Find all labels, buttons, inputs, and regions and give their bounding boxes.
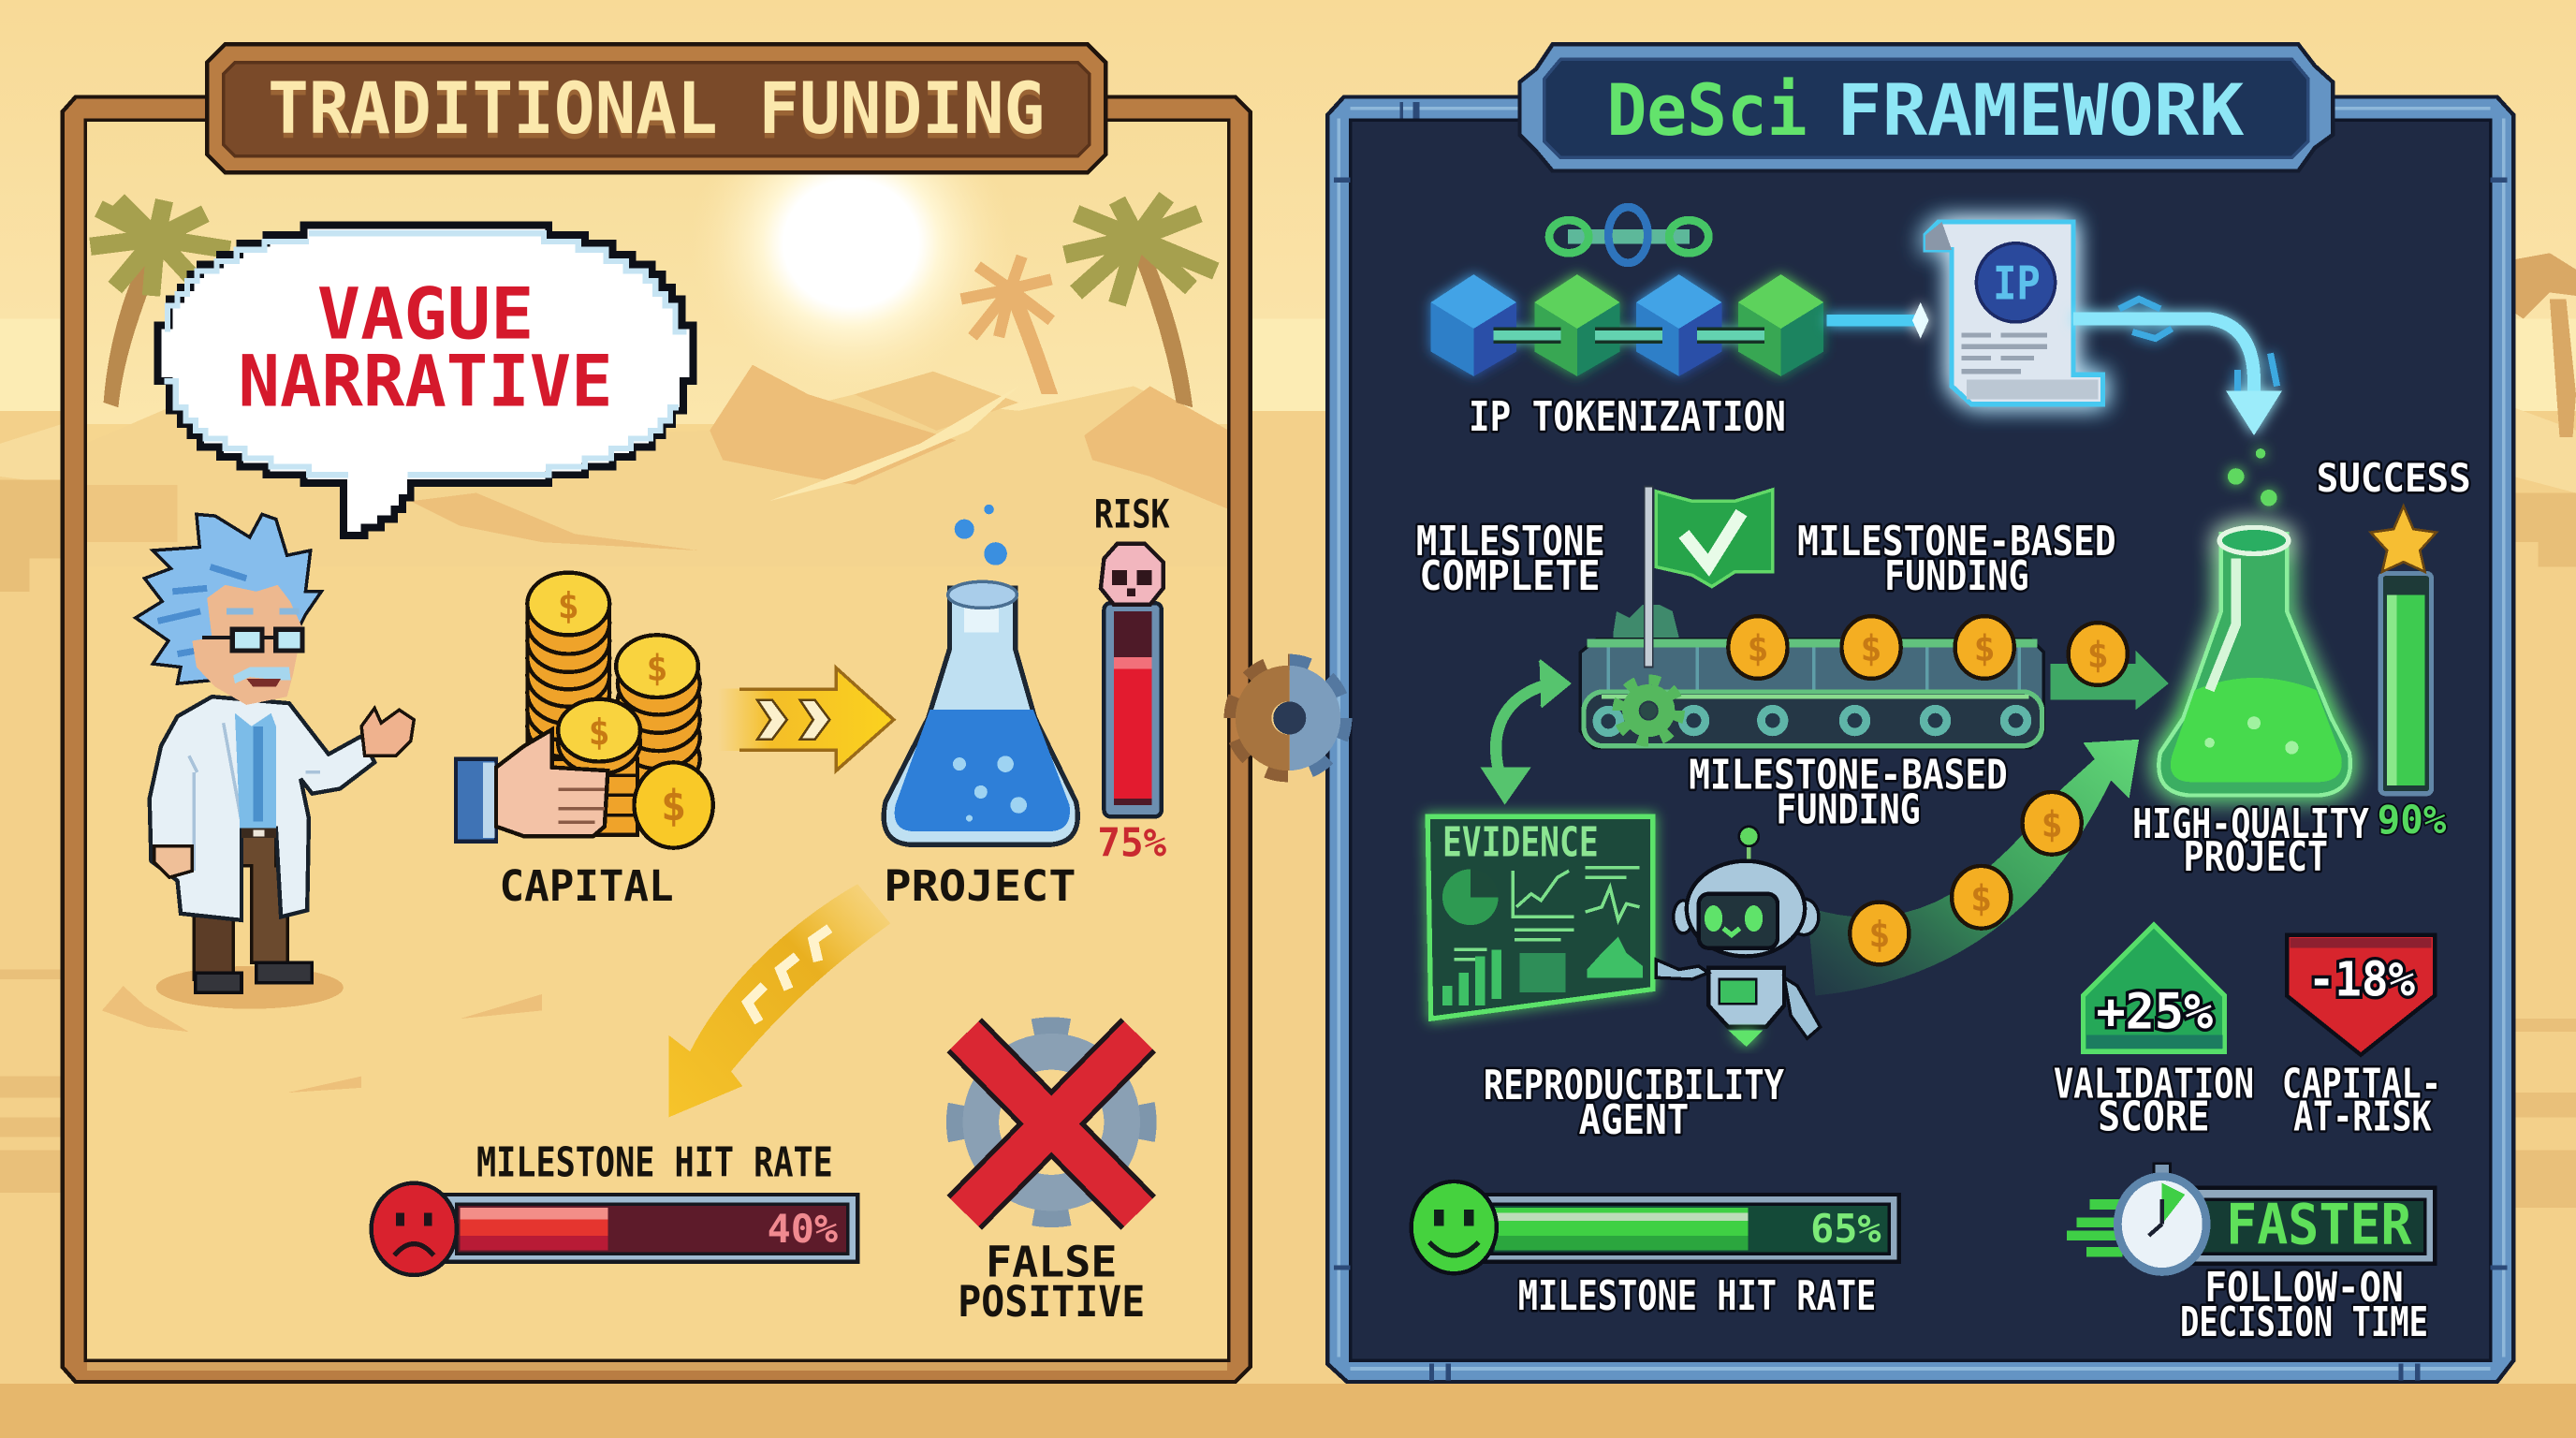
icon: center linked gears xyxy=(1232,662,1344,774)
coin b xyxy=(1952,866,2011,929)
label: project: PROJECT xyxy=(2184,833,2328,881)
panel: traditional funding xyxy=(63,92,1251,1382)
arrow: robot to flask curved green xyxy=(1808,740,2139,996)
icon: conveyor coins xyxy=(1728,616,2014,679)
icon: milestone flag xyxy=(1645,487,1773,668)
panel frame xyxy=(63,97,1251,1382)
cube 3 xyxy=(1636,274,1721,376)
heading: traditional funding: TRADITIONAL FUNDING xyxy=(268,72,1045,154)
icon: star xyxy=(2371,506,2437,572)
icon: speed lines xyxy=(2067,1204,2123,1252)
chart: evidence board xyxy=(1427,816,1653,1019)
coin stack short xyxy=(616,635,700,790)
label: funding: FUNDING xyxy=(1776,785,1921,833)
face xyxy=(192,585,302,705)
coin 2 xyxy=(1841,616,1901,679)
text: narrative: NARRATIVE xyxy=(238,341,613,423)
icon: chain link xyxy=(1549,207,1708,263)
desert scene xyxy=(85,92,1229,1360)
icon: distant palm at right edge xyxy=(2513,253,2576,437)
lower stack edges xyxy=(552,759,637,835)
legs xyxy=(194,914,233,979)
label: at-risk: AT-RISK xyxy=(2293,1093,2432,1141)
text: +25%: +25% xyxy=(2097,984,2213,1041)
text: IP badge: IP xyxy=(1993,256,2041,310)
hand xyxy=(456,729,607,842)
stat: 40%: 40% xyxy=(768,1206,839,1252)
heading: DeSci framework: FRAMEWORK xyxy=(1837,69,2245,152)
icon: green flask xyxy=(2159,527,2350,795)
front coin: $ xyxy=(588,712,610,754)
hair xyxy=(136,514,321,683)
icon: false positive broken gear xyxy=(956,1027,1147,1218)
coin stack tall: $ xyxy=(558,585,579,627)
icon: skull xyxy=(1101,544,1164,605)
chart: milestone hit rate 40% xyxy=(372,1139,857,1275)
arrow: cycle between conveyor and evidence xyxy=(1484,661,1569,801)
heading: traditional funding: TRADITIONAL FUNDING xyxy=(268,67,1045,150)
label: milestone hit rate: MILESTONE HIT RATE xyxy=(476,1139,833,1187)
label: positive: POSITIVE xyxy=(958,1277,1145,1327)
coin c: $ xyxy=(2041,803,2063,845)
chart: risk tube xyxy=(1101,544,1164,816)
front coin xyxy=(558,699,640,774)
lab coat xyxy=(150,697,374,920)
label: risk: RISK xyxy=(1094,491,1170,536)
label: milestone-based: MILESTONE-BASED xyxy=(1689,751,2008,799)
arrow: scroll to green flask xyxy=(2073,299,2282,435)
text: faster: FASTER xyxy=(2226,1194,2412,1258)
label: capital: CAPITAL xyxy=(500,861,674,911)
coin a xyxy=(1850,902,1909,964)
panel frame xyxy=(1327,97,2513,1382)
text lines on scroll xyxy=(1962,335,2047,372)
icon: green bubbles xyxy=(2228,448,2277,506)
coin b: $ xyxy=(1970,877,1992,919)
pie chart xyxy=(1442,869,1499,925)
icon: coin on arrow: $ xyxy=(2087,635,2109,677)
label: success: SUCCESS xyxy=(2317,455,2471,501)
text: evidence: EVIDENCE xyxy=(1442,818,1599,866)
chart: milestone hit rate 65% xyxy=(1412,1181,1899,1273)
stat: risk 75%: 75% xyxy=(1097,819,1167,865)
hands xyxy=(154,846,192,877)
label: IP tokenization: IP TOKENIZATION xyxy=(1469,393,1786,441)
panel: DeSci framework xyxy=(1327,97,2513,1382)
heading: DeSci framework: DeSci xyxy=(1606,69,1808,152)
arrow: project to milestone rate xyxy=(668,884,890,1117)
label: milestone-based: MILESTONE-BASED xyxy=(1797,518,2116,565)
icon: blockchain cubes xyxy=(1431,274,1823,376)
stat: 65%: 65% xyxy=(1810,1206,1881,1252)
icon: coin on arrow xyxy=(2069,623,2128,685)
cube 2 xyxy=(1534,274,1620,376)
large coin: $ xyxy=(661,781,686,830)
heading: traditional funding xyxy=(207,44,1105,172)
heading: DeSci framework xyxy=(1519,44,2333,171)
stat: validation score up arrow xyxy=(2083,925,2224,1051)
arrow: capital to project xyxy=(718,668,894,770)
label: capital-: CAPITAL- xyxy=(2282,1060,2441,1108)
chart: success tube xyxy=(2371,506,2437,794)
label: project: PROJECT xyxy=(884,861,1076,911)
icon: stopwatch xyxy=(2117,1164,2206,1271)
icon: small faded palm xyxy=(961,257,1058,394)
coin 3: $ xyxy=(1974,628,1996,670)
icon: IP scroll document xyxy=(1925,222,2103,404)
label: high-quality: HIGH-QUALITY xyxy=(2132,800,2369,848)
coin 1: $ xyxy=(1747,628,1769,670)
icon: right palm xyxy=(1064,198,1216,407)
moustache xyxy=(233,668,291,683)
text: vague: VAGUE xyxy=(317,273,534,356)
coin a: $ xyxy=(1868,914,1890,956)
icon: conveyor belt xyxy=(1580,605,2043,748)
stat: faster decision time xyxy=(2067,1164,2435,1271)
coin c xyxy=(2023,792,2082,855)
cube 4 xyxy=(1738,274,1823,376)
label: reproducibility: REPRODUCIBILITY xyxy=(1484,1062,1785,1109)
label: follow-on: FOLLOW-ON xyxy=(2204,1264,2404,1312)
cube 1 xyxy=(1431,274,1516,376)
icon: sad face xyxy=(372,1183,457,1275)
inner border xyxy=(85,120,1229,1360)
label: validation: VALIDATION xyxy=(2054,1060,2254,1108)
label: milestone hit rate: MILESTONE HIT RATE xyxy=(1518,1272,1876,1320)
label: complete: COMPLETE xyxy=(1419,552,1600,600)
icon: blue flask xyxy=(884,505,1077,844)
coin stack short: $ xyxy=(646,648,668,690)
label: score: SCORE xyxy=(2098,1093,2210,1141)
mini charts xyxy=(1454,868,1640,960)
text: -18%: -18% xyxy=(2308,953,2415,1008)
glasses xyxy=(232,629,302,651)
shirt xyxy=(235,713,276,829)
icon: left palm xyxy=(91,200,230,407)
stat: success 90%: 90% xyxy=(2378,797,2447,843)
callout: vague narrative speech bubble xyxy=(157,225,694,536)
coin 3 xyxy=(1955,616,2014,679)
icon: capital coins and hand xyxy=(456,573,713,848)
arrow: conveyor to flask xyxy=(2050,651,2169,710)
stat: capital-at-risk shield xyxy=(2287,935,2435,1055)
icon: reproducibility agent robot xyxy=(1656,827,1821,1047)
coin 1 xyxy=(1728,616,1788,679)
label: funding: FUNDING xyxy=(1884,552,2029,600)
icon: arrow coins xyxy=(1850,792,2082,964)
arrow: cubes to scroll xyxy=(1827,302,1928,339)
panel interior xyxy=(1351,120,2491,1360)
coin 2: $ xyxy=(1860,628,1882,670)
label: false: FALSE xyxy=(986,1238,1117,1287)
coin stack tall xyxy=(526,573,611,769)
label: milestone: MILESTONE xyxy=(1416,518,1605,565)
large coin xyxy=(634,762,713,848)
icon: smiley xyxy=(1412,1181,1497,1273)
icon: scientist xyxy=(136,514,414,1009)
label: decision time: DECISION TIME xyxy=(2180,1299,2428,1346)
label: agent: AGENT xyxy=(1579,1096,1689,1144)
